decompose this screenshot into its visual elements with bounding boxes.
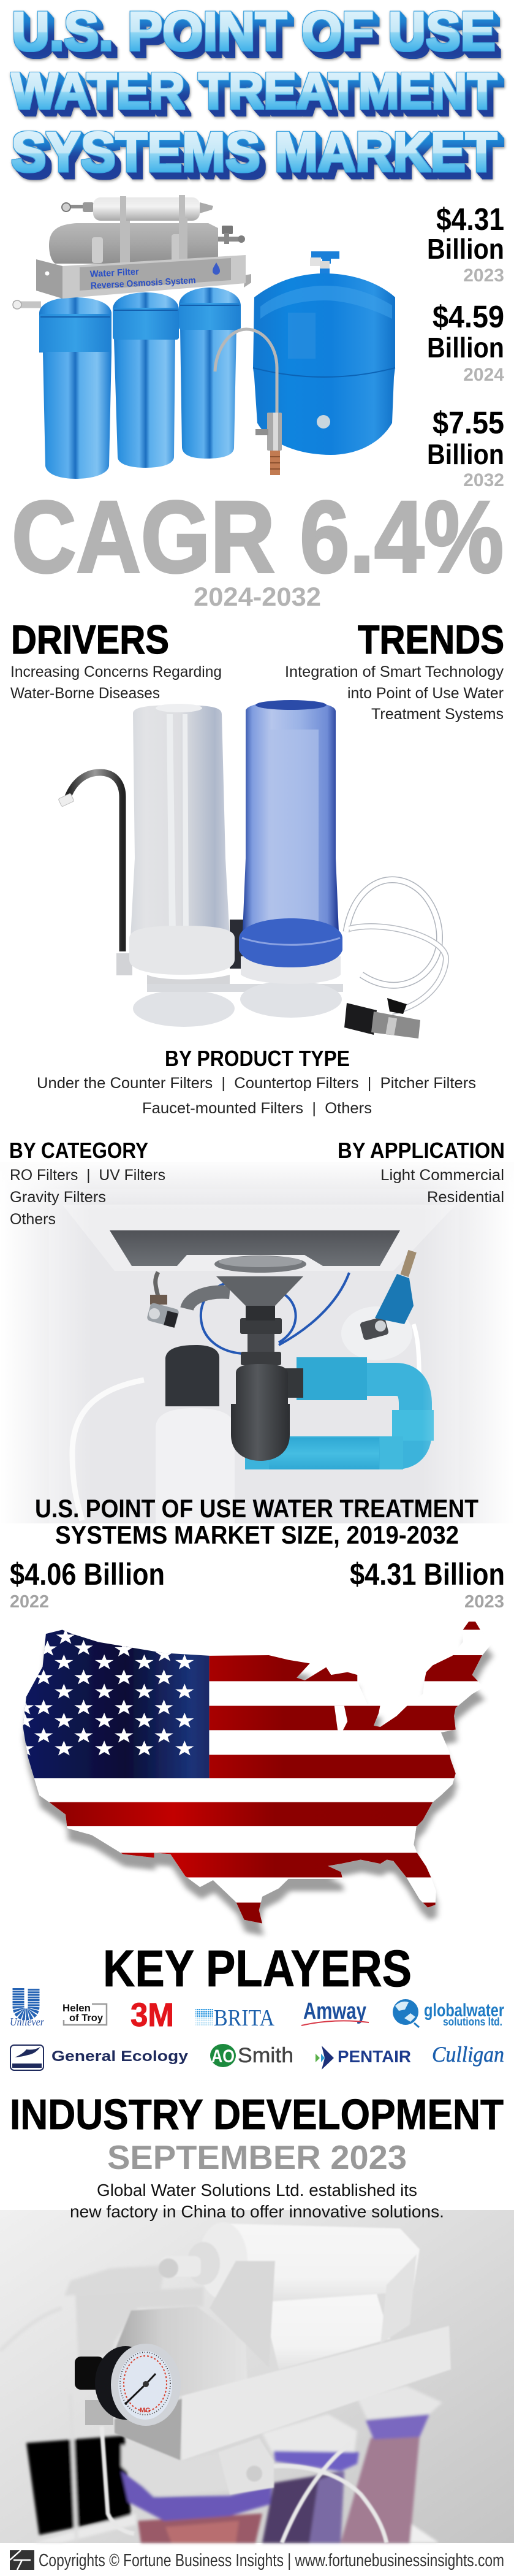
sink drain funnel and pipe (214, 1256, 306, 1365)
pressure gauge (75, 2344, 181, 2426)
drivers block (10, 617, 222, 702)
mounting band (182, 2326, 451, 2460)
ribbed end cap (115, 2306, 248, 2396)
market size 2023: 2023 (464, 1592, 504, 1612)
drivers block: Water-Borne Diseases (10, 685, 160, 702)
fitting and tubes (218, 2438, 274, 2494)
mounting bracket with label: Water Filter (89, 267, 139, 280)
left tubing (0, 2308, 77, 2541)
filter canisters (13, 274, 251, 479)
trends block (285, 617, 504, 723)
by application: Residential (427, 1189, 504, 1206)
by application (338, 1138, 505, 1206)
bracket back plate (75, 2287, 203, 2360)
market size 2022 (10, 1557, 165, 1612)
stat 2032: Billion (427, 438, 504, 470)
drivers block: DRIVERS (11, 617, 169, 662)
stat 2024: $4.59 (433, 299, 504, 334)
stat 2032 (427, 405, 504, 490)
logo: Helen of Troy: of Troy (69, 2012, 104, 2024)
stat 2024 (427, 299, 504, 385)
trends block: into Point of Use Water (347, 685, 504, 702)
stat 2032: $7.55 (433, 405, 504, 440)
by product type: Faucet-mounted Filters | Others (142, 1100, 372, 1117)
stat 2023: $4.31 (436, 202, 504, 237)
icon: Fortune Business Insights logo (10, 2550, 34, 2570)
logo: General Ecology: General Ecology (51, 2048, 189, 2065)
image: reverse osmosis water filter system (13, 195, 395, 479)
key players heading: KEY PLAYERS (103, 1940, 412, 1997)
logo: Amway: Amway (303, 1999, 366, 2024)
upper membrane cylinder (62, 195, 213, 227)
logo: BRITA: BRITA (214, 2005, 274, 2031)
by category (9, 1138, 165, 1228)
by category: BY CATEGORY (9, 1138, 148, 1163)
logo: A.O. Smith (210, 2044, 293, 2067)
trends block: Integration of Smart Technology (285, 663, 504, 680)
logo: Global Water Solutions: solutions ltd. (443, 2016, 502, 2028)
lower gray cylinder (49, 218, 245, 265)
pressure gauge: MG (140, 2407, 151, 2414)
white filter housing (116, 704, 343, 1027)
left shutoff valve (146, 1272, 180, 1328)
lower white cylinder (262, 2294, 390, 2369)
logo: Unilever: Unilever (10, 2016, 45, 2028)
by product type: BY PRODUCT TYPE (165, 1046, 350, 1071)
black filter head (165, 1345, 219, 1406)
title (11, 0, 497, 183)
brackets (210, 2261, 275, 2368)
faucet (215, 329, 282, 475)
white filter cartridge (156, 1408, 235, 1523)
middle canister (262, 2414, 359, 2543)
mounting bracket with label: Reverse Osmosis System (90, 275, 196, 291)
image: countertop water filter (58, 700, 446, 1038)
development description: new factory in China to offer innovative solutions. (70, 2202, 444, 2221)
right shutoff valve and blue inline filter (341, 1250, 420, 1379)
water hose (346, 880, 446, 1012)
stat 2032: 2032 (463, 470, 504, 490)
market value statistics (427, 202, 504, 490)
market size 2022: 2022 (10, 1592, 49, 1612)
drivers block: Increasing Concerns Regarding (10, 663, 222, 680)
stat 2023: Billion (427, 233, 504, 265)
logo: Global Water Solutions (393, 1999, 504, 2028)
logo: General Ecology (10, 2045, 189, 2070)
logo: Unilever (10, 1988, 45, 2028)
table edge (387, 2518, 439, 2543)
title: WATER TREATMENT (11, 63, 497, 119)
by application: Light Commercial (380, 1167, 504, 1184)
logo: Culligan: Culligan (432, 2042, 504, 2067)
stat 2023: 2023 (463, 265, 504, 286)
blue trap pipe (245, 1357, 434, 1469)
logo: 3M: 3M (130, 1997, 174, 2033)
market size heading: SYSTEMS MARKET SIZE, 2019-2032 (55, 1520, 459, 1549)
image: under-sink water filter installation (0, 1162, 514, 1523)
blurred background parts (0, 2265, 442, 2543)
by product type (37, 1046, 476, 1117)
flag red stripes (49, 1621, 483, 1924)
logo: A.O. Smith: AO (211, 2046, 235, 2067)
development date: SEPTEMBER 2023 (107, 2138, 407, 2176)
logo: Helen of Troy (62, 2002, 107, 2025)
bottle trap (231, 1364, 290, 1461)
mounting bracket with label (36, 255, 246, 299)
logo: A.O. Smith: Smith (238, 2044, 293, 2067)
sink underside (62, 1205, 456, 1271)
stat 2023 (427, 202, 504, 286)
logo: Pentair: PENTAIR (338, 2047, 411, 2066)
market size heading (35, 1494, 478, 1549)
development description (70, 2181, 444, 2221)
spout (67, 772, 123, 951)
rear canister (341, 2386, 442, 2543)
by product type: Under the Counter Filters | Countertop Filters | Pitcher Filters (37, 1075, 476, 1092)
white cylinders and bracket (102, 2222, 451, 2543)
market size 2022: $4.06 Billion (10, 1557, 165, 1591)
flag canton with stars (23, 1629, 210, 1778)
US flag map (0, 1615, 514, 1929)
stat 2024: 2024 (463, 365, 504, 385)
market size 2023 (350, 1557, 505, 1612)
great lake cut-out (334, 1706, 347, 1731)
CAGR period: 2024-2032 (194, 582, 321, 612)
black panel (26, 2436, 131, 2535)
white hose (72, 1380, 144, 1520)
blue water lines (201, 1273, 349, 1354)
logo: Helen of Troy: Helen (62, 2002, 91, 2014)
shutoff valve (344, 998, 420, 1038)
photo vignette (0, 1162, 514, 1523)
by category: Others (10, 1211, 56, 1228)
title: U.S. POINT OF USE (12, 0, 495, 61)
corrugated hose (187, 1292, 230, 1309)
development description: Global Water Solutions Ltd. established its (97, 2181, 417, 2200)
trends block: Treatment Systems (371, 706, 504, 723)
stat 2024: Billion (427, 332, 504, 364)
logo: Pentair (316, 2046, 411, 2070)
sink mat (110, 1230, 400, 1266)
by category: Gravity Filters (10, 1189, 106, 1206)
by category: RO Filters | UV Filters (10, 1167, 165, 1184)
front canister (121, 2445, 272, 2543)
image: RO system with pressure gauge (0, 2210, 514, 2543)
support bar (230, 920, 251, 969)
blue transparent filter housing (239, 700, 342, 1018)
upper white cylinder (223, 2224, 420, 2301)
storage tank (253, 251, 395, 455)
